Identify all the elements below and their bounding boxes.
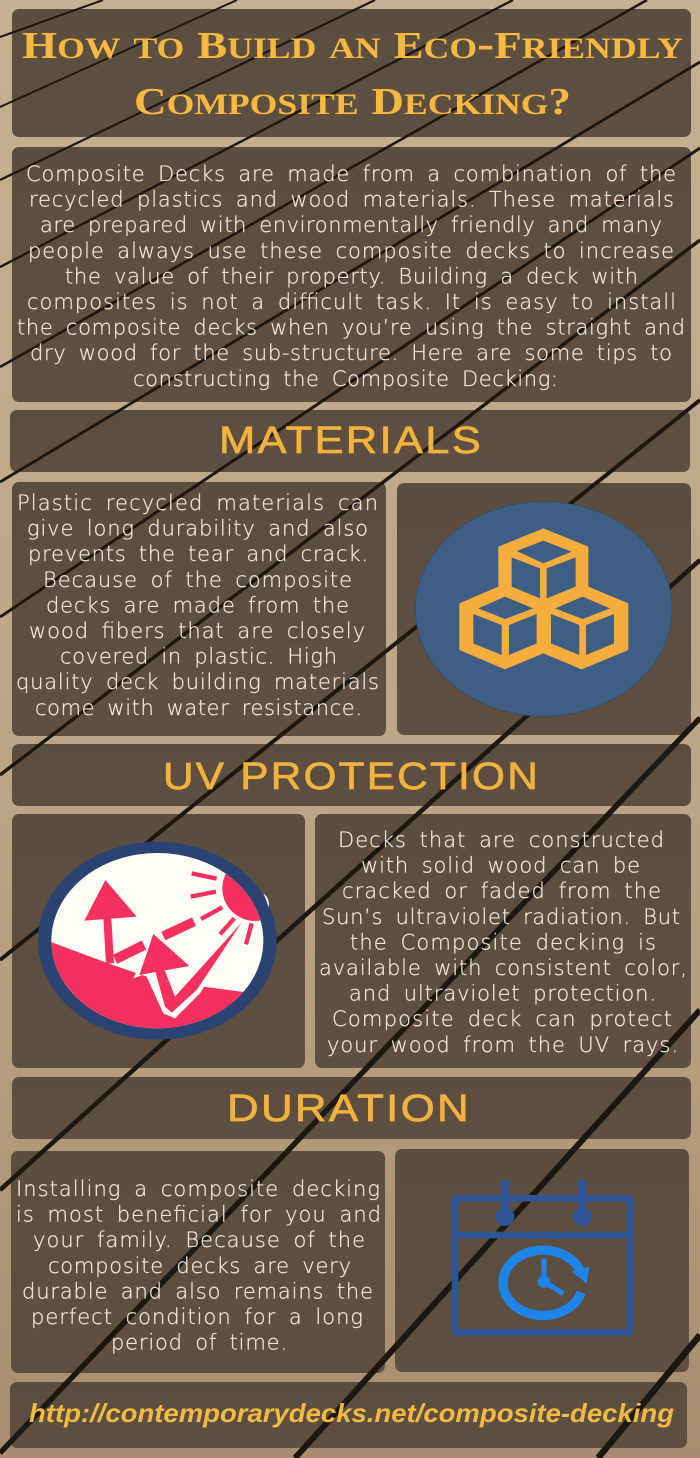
uv text: Decks that are constructed bbox=[338, 828, 664, 852]
materials text: give long durability and also bbox=[27, 517, 368, 541]
intro text: recycled plastics and wood materials. These materials bbox=[29, 188, 674, 212]
duration text: Installing a composite decking bbox=[16, 1177, 380, 1201]
reflected arrow bbox=[84, 880, 144, 963]
uv text: Composite deck can protect bbox=[332, 1007, 672, 1031]
duration text: composite decks are very bbox=[48, 1254, 351, 1278]
direct arrow bbox=[133, 922, 243, 1018]
title: How to Build an Eco- Friendly bbox=[22, 21, 683, 68]
materials text: covered in plastic. High bbox=[60, 645, 337, 669]
materials text: Because of the composite bbox=[43, 568, 352, 592]
duration text: durable and also remains the bbox=[22, 1279, 373, 1303]
materials text: Plastic recycled materials can bbox=[17, 491, 378, 515]
intro text: Composite Decks are made from a combination of the bbox=[26, 162, 676, 186]
uv text: and ultraviolet protection. bbox=[349, 982, 656, 1006]
materials text: decks are made from the bbox=[46, 593, 349, 617]
icon: uv reflection bbox=[33, 842, 288, 1043]
intro text: constructing the Composite Decking: bbox=[133, 367, 558, 391]
materials text: come with water resistance. bbox=[35, 696, 362, 720]
cube cluster bbox=[459, 528, 628, 669]
scene bbox=[51, 853, 264, 1028]
uv text: available with consistent color, bbox=[319, 956, 687, 980]
uv text: cracked or faded from the bbox=[342, 879, 661, 903]
duration text bbox=[16, 1177, 381, 1355]
title: Composite Decking ? bbox=[134, 77, 571, 124]
sun rays bbox=[163, 873, 252, 944]
materials text: wood fibers that are closely bbox=[29, 619, 365, 643]
icon disc bbox=[38, 842, 277, 1040]
heading: materials: MATERIALS bbox=[219, 420, 483, 462]
intro text: the value of their property. Building a deck with bbox=[65, 264, 638, 288]
intro text bbox=[17, 162, 685, 391]
icon disc bbox=[415, 502, 672, 716]
clock bbox=[503, 1250, 589, 1315]
materials text: prevents the tear and crack. bbox=[28, 542, 368, 566]
footer url: http://contemporarydecks.net/composite-decking bbox=[29, 1398, 674, 1428]
intro text: composites is not a difficult task. It is easy to install bbox=[27, 290, 676, 314]
duration text: perfect condition for a long bbox=[31, 1305, 363, 1329]
materials text: quality deck building materials bbox=[16, 670, 379, 694]
calendar bbox=[455, 1180, 630, 1332]
heading: uv protection: UV PROTECTION bbox=[163, 756, 540, 798]
uv text: with solid wood can be bbox=[361, 854, 640, 878]
icon: calendar clock bbox=[455, 1180, 630, 1332]
intro text: are prepared with environmentally friendly and many bbox=[40, 213, 662, 237]
uv text: the Composite decking is bbox=[350, 930, 656, 954]
heading: duration: DURATION bbox=[227, 1088, 471, 1130]
uv text: Sun’s ultraviolet radiation. But bbox=[322, 905, 680, 929]
glint bbox=[263, 893, 269, 907]
materials text bbox=[16, 491, 379, 720]
duration text: is most beneficial for you and bbox=[16, 1203, 381, 1227]
icon: cubes bbox=[415, 502, 672, 716]
duration text: period of time. bbox=[111, 1331, 287, 1355]
uv text bbox=[319, 828, 687, 1057]
intro text: the composite decks when you’re using the straight and bbox=[17, 316, 685, 340]
title bbox=[22, 21, 683, 124]
intro text: dry wood for the sub-structure. Here are some tips to bbox=[30, 341, 672, 365]
uv text: your wood from the UV rays. bbox=[327, 1033, 678, 1057]
intro text: people always use these composite decks to increase bbox=[28, 239, 674, 263]
duration text: your family. Because of the bbox=[33, 1228, 365, 1252]
